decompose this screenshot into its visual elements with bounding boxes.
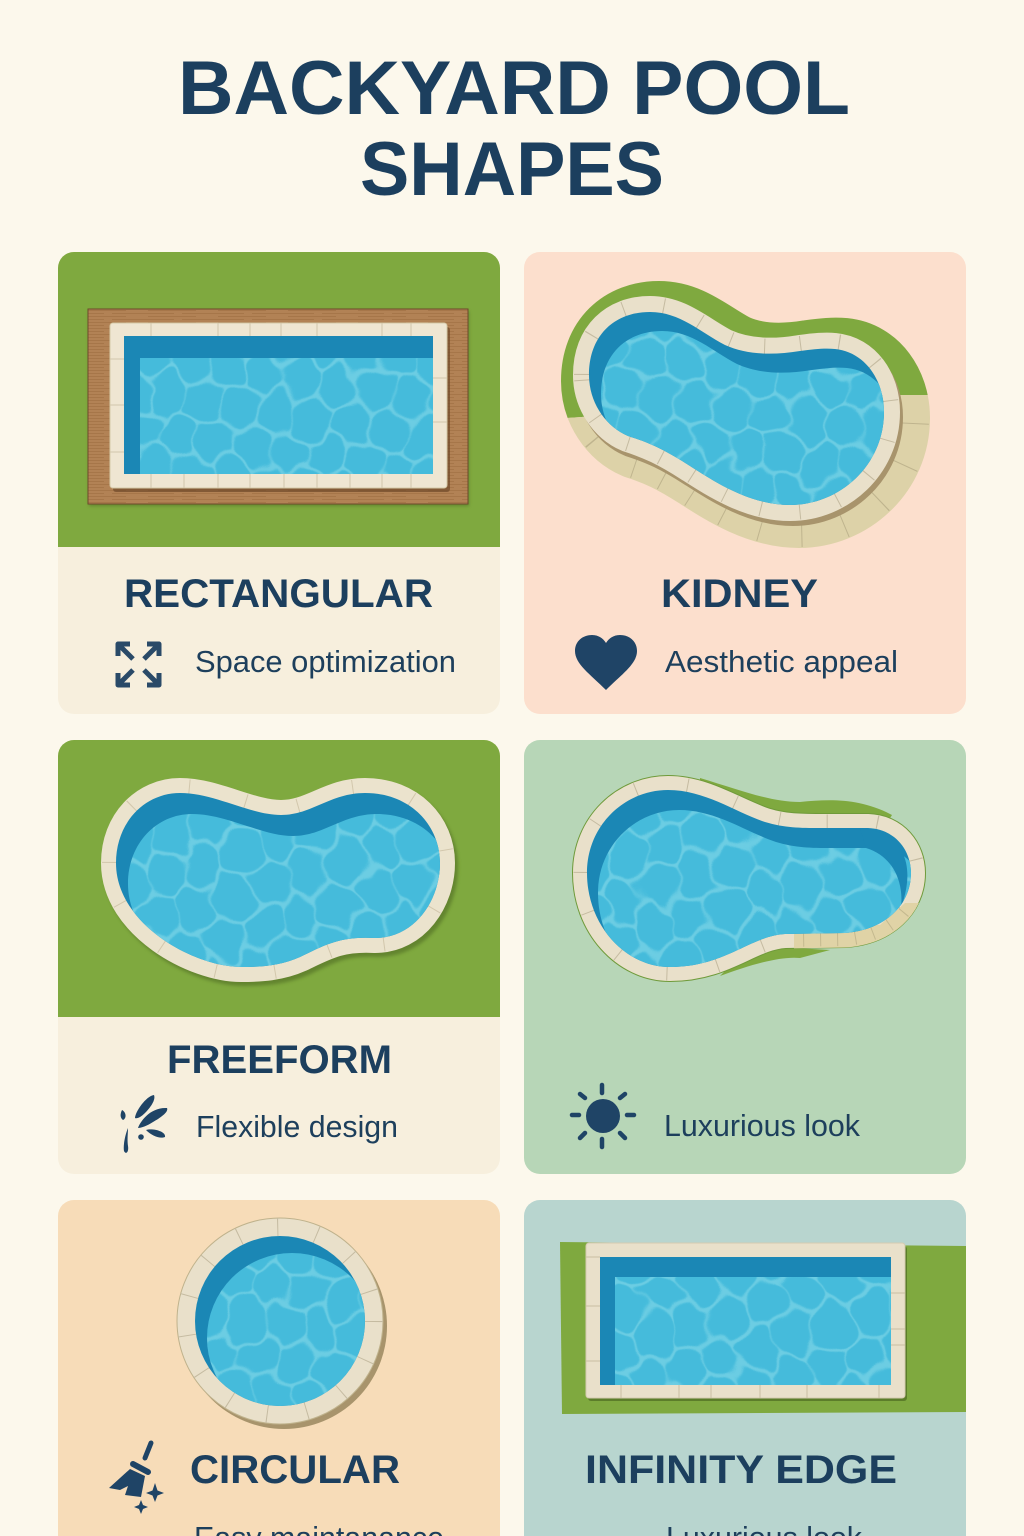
- panel: infinity edge: [524, 1200, 966, 1536]
- panel: luxury pool: [524, 740, 966, 1174]
- panel: rectangular: [58, 252, 500, 714]
- heading: FREEFORM: [167, 1038, 392, 1082]
- lagoon pool illustration: [575, 778, 925, 980]
- benefit text: Luxurious look: [664, 1108, 860, 1143]
- icon: sun: [572, 1085, 634, 1147]
- grass area: [58, 252, 500, 547]
- grass area: [58, 740, 500, 1017]
- panel: kidney: [524, 252, 966, 714]
- kidney pool illustration: [580, 305, 900, 520]
- panel: circular: [58, 1200, 500, 1536]
- icon: expand arrows: [118, 644, 159, 685]
- panel: freeform: [58, 740, 500, 1174]
- benefit text: Flexible design: [196, 1109, 398, 1144]
- benefit text: Space optimization: [195, 644, 456, 679]
- icon: splash: [121, 1095, 167, 1153]
- icon: broom: [109, 1443, 164, 1514]
- infinity pool illustration: [560, 1242, 966, 1414]
- benefit text: Aesthetic appeal: [665, 644, 898, 679]
- rectangular pool illustration: [88, 309, 469, 506]
- title: BACKYARD POOL: [178, 46, 850, 131]
- circular pool illustration: [177, 1218, 387, 1429]
- heading: INFINITY EDGE: [585, 1448, 897, 1492]
- freeform pool illustration: [105, 785, 455, 980]
- heading: KIDNEY: [661, 572, 818, 616]
- heading: RECTANGULAR: [124, 572, 433, 616]
- heading: CIRCULAR: [190, 1448, 400, 1492]
- title: [178, 46, 850, 212]
- icon: heart: [575, 635, 637, 690]
- title: SHAPES: [360, 127, 664, 212]
